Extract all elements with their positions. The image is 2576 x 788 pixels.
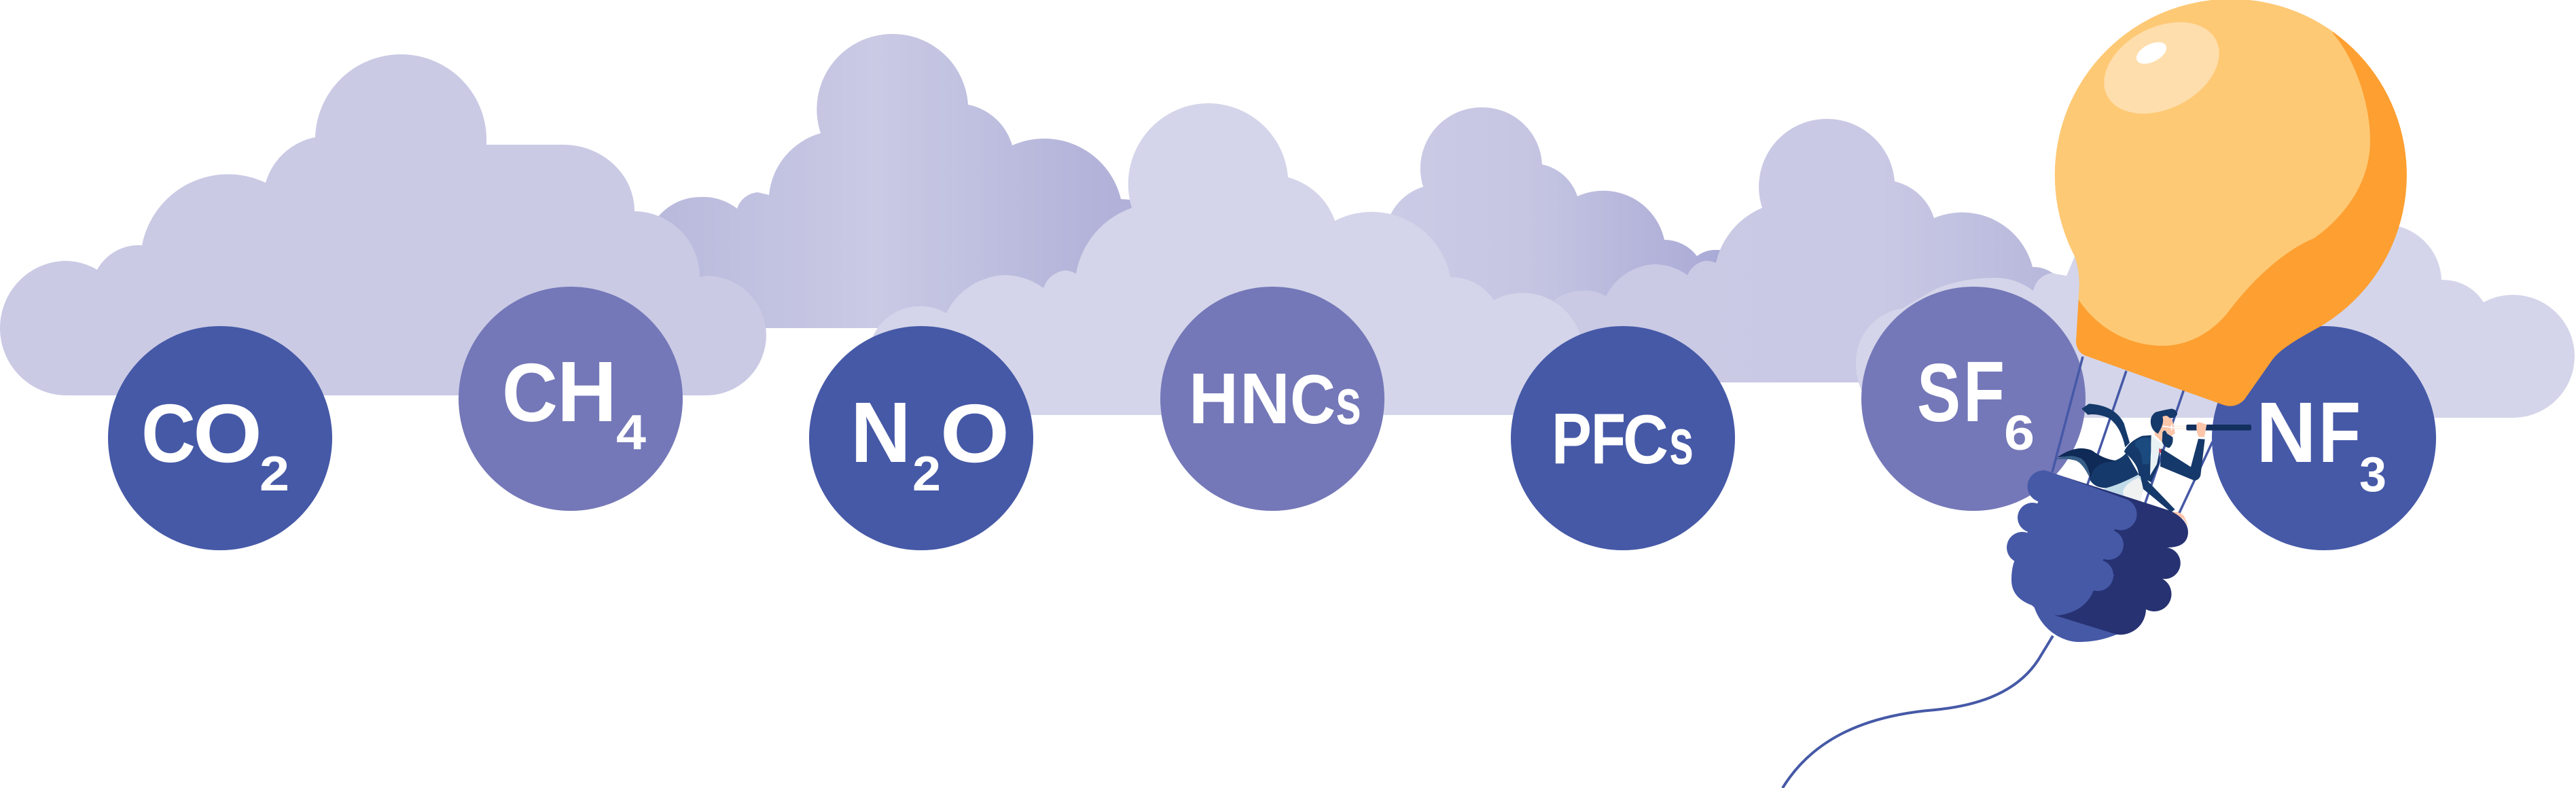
gas bubble: CO2: 2 xyxy=(260,447,289,501)
gas bubble: PFCs: s xyxy=(1669,406,1694,478)
gas bubble: SF6: F xyxy=(1963,344,2005,440)
gas bubble: CH4: H xyxy=(557,344,617,440)
basket second band xyxy=(2033,518,2109,545)
glasses xyxy=(2162,425,2175,430)
torso xyxy=(2124,435,2160,482)
trouser highlight xyxy=(2123,478,2143,502)
man with telescope xyxy=(2055,404,2251,526)
gas bubble: NF3: 3 xyxy=(2359,448,2386,502)
coat tail strap xyxy=(2081,404,2130,447)
basket xyxy=(2011,470,2188,642)
gas bubble: CO2: O xyxy=(193,387,262,480)
cloud: middle cloud behind HNCs xyxy=(870,103,1590,415)
envelope glint xyxy=(2133,38,2170,68)
telescope xyxy=(2186,425,2251,431)
cloud: cloud behind SF6 xyxy=(1542,119,2079,382)
gas bubble: CH4: C xyxy=(502,346,558,439)
gas bubble: N2O: O xyxy=(940,387,1009,480)
gas bubble: HNCs: s xyxy=(1336,365,1361,438)
trousers xyxy=(2104,474,2145,502)
envelope light yellow xyxy=(2038,0,2370,346)
leg xyxy=(2090,453,2139,488)
gas bubble: NF3: F xyxy=(2319,384,2361,480)
cloud: back cloud behind N2O xyxy=(645,34,1160,328)
basket top band xyxy=(2043,486,2121,514)
gas bubble: N2O: N xyxy=(851,384,911,480)
lower arm xyxy=(2139,469,2175,512)
gas bubble: PFCs: C xyxy=(1623,401,1668,478)
basket fill between bands xyxy=(2022,486,2121,575)
lapel xyxy=(2135,437,2151,464)
cloud: back cloud between HNCs and PFCs xyxy=(1372,107,1766,340)
coat tail lining xyxy=(2055,456,2090,478)
coat tail xyxy=(2057,448,2128,482)
gas bubble: NF3 xyxy=(2212,326,2436,550)
lower hand xyxy=(2172,512,2189,526)
cloud: right cloud behind balloon xyxy=(1856,204,2575,418)
balloon ropes xyxy=(2052,357,2213,513)
gas bubble: HNCs xyxy=(1160,287,1384,511)
balloon envelope xyxy=(2038,0,2407,406)
shirt xyxy=(2150,435,2164,476)
gas bubble: PFCs xyxy=(1511,326,1735,550)
gas bubble: PFCs: P xyxy=(1552,399,1592,479)
gas bubble: CH4: 4 xyxy=(616,406,646,460)
tie xyxy=(2159,448,2162,453)
gas bubble: N2O xyxy=(809,326,1033,550)
gas bubble: SF6: 6 xyxy=(2004,406,2035,461)
beard xyxy=(2162,431,2173,448)
gas bubble: HNCs: N xyxy=(1240,359,1290,439)
trailing rope below basket xyxy=(1783,636,2053,788)
gas bubble: HNCs: H xyxy=(1189,359,1238,439)
envelope orange shade xyxy=(2055,0,2407,406)
hair xyxy=(2151,409,2177,433)
gas bubble: HNCs: C xyxy=(1290,361,1336,438)
basket third band xyxy=(2022,548,2098,575)
envelope highlight xyxy=(2089,4,2234,132)
gas bubble: SF6: S xyxy=(1917,346,1961,439)
face xyxy=(2155,414,2175,445)
gas bubble: CO2: C xyxy=(141,387,196,480)
gas bubble: CH4 xyxy=(459,287,683,511)
cloud: overlap of the middle cloud on the SF6 cloud xyxy=(1494,293,1590,415)
basket dark side xyxy=(2038,470,2188,634)
basket bottom lobe xyxy=(2032,584,2117,642)
eye beam xyxy=(2175,426,2186,429)
gas bubble: N2O: 2 xyxy=(912,447,941,501)
gas bubble: CO2 xyxy=(108,326,332,550)
gas bubble: PFCs: F xyxy=(1591,399,1626,479)
gas bubble: NF3: N xyxy=(2256,384,2316,480)
raised arm xyxy=(2160,439,2205,480)
basket light side xyxy=(2011,554,2114,615)
cloud: large left cloud xyxy=(0,54,766,395)
gas bubble: SF6 xyxy=(1861,287,2086,511)
hand on telescope xyxy=(2196,422,2206,437)
